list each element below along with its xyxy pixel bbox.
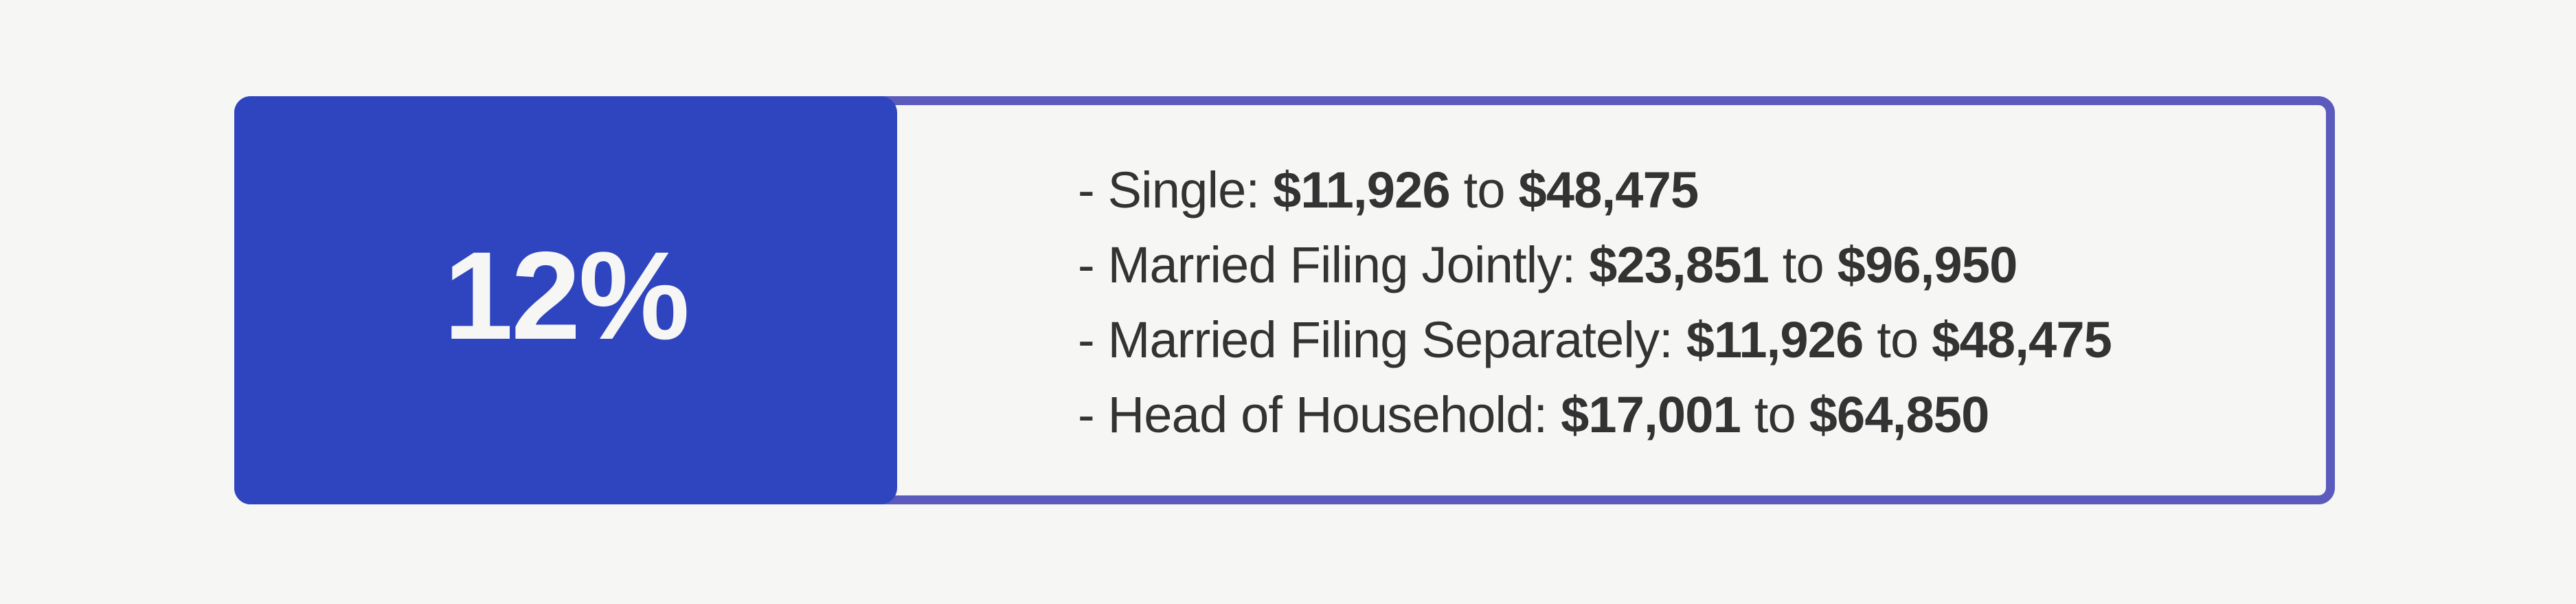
line: married separately: - Married Filing Separately: $11,926 to $48,475 — [1078, 311, 2112, 368]
panel: bracket box outline — [234, 96, 2335, 504]
heading: 12% rate: 12% — [444, 225, 688, 366]
text block: income ranges — [1078, 161, 2112, 443]
line: head of household: - Head of Household: $17,001 to $64,850 — [1078, 386, 1989, 443]
line: married jointly: - Married Filing Jointly: $23,851 to $96,950 — [1078, 236, 2018, 293]
panel: rate block — [234, 96, 897, 504]
line: single: - Single: $11,926 to $48,475 — [1078, 161, 1698, 219]
